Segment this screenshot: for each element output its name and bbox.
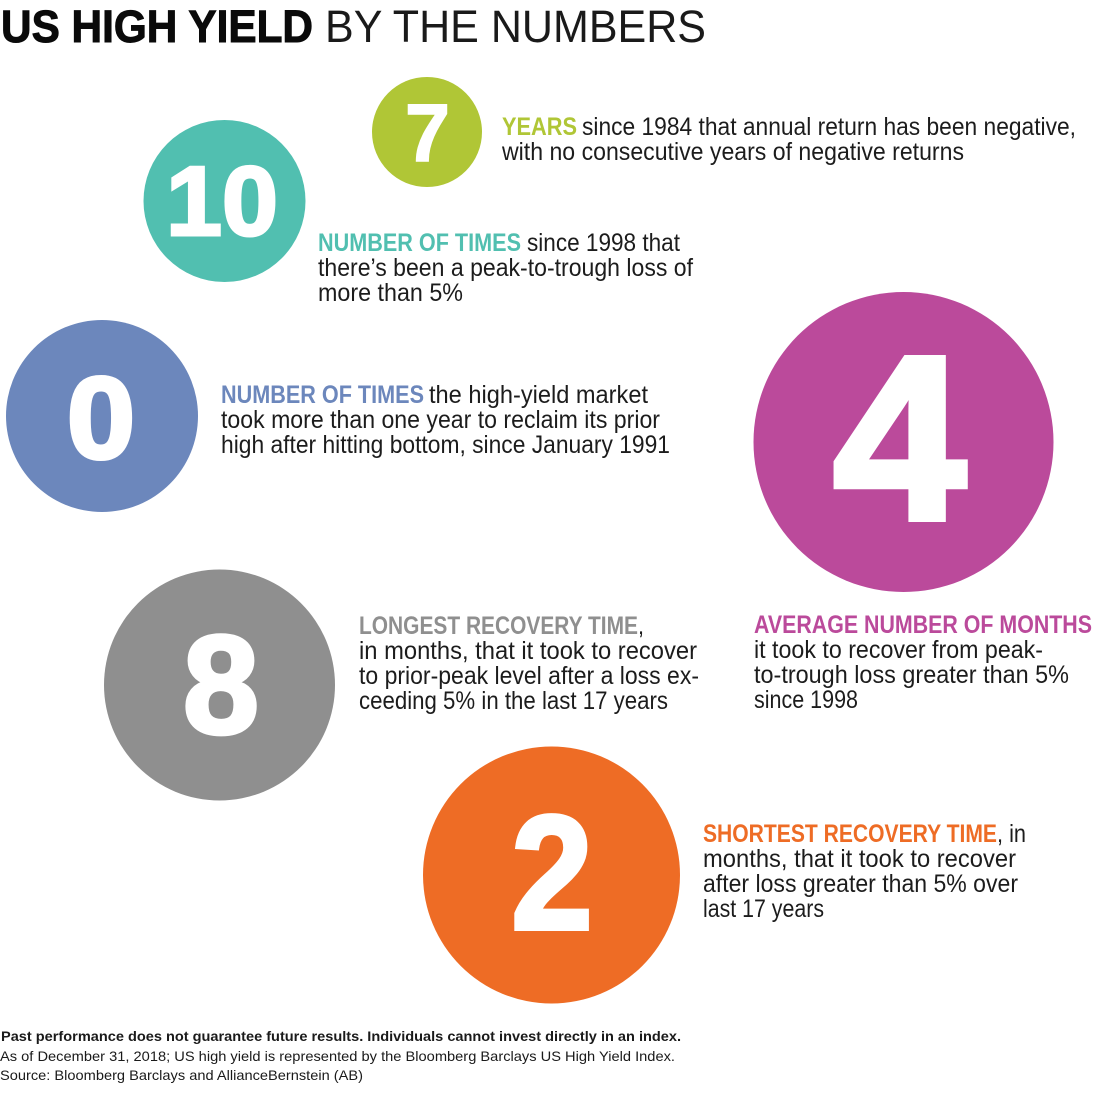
title: BY THE NUMBERS: [325, 1, 706, 52]
text: number of times peak-to-trough: NUMBER OF TIMES: [318, 229, 521, 257]
icon: orange circle 2: [423, 746, 680, 1004]
text: longest recovery: ,: [638, 612, 644, 640]
panel: 10 times: [144, 120, 693, 307]
icon: teal circle 10: [144, 120, 306, 282]
icon: teal circle 10: 10: [166, 146, 278, 256]
icon: gray circle 8: [104, 570, 335, 800]
text: average months: [754, 611, 1092, 714]
icon: gray circle 8: 8: [183, 606, 259, 763]
text: average months: to-trough loss greater than 5%: [754, 661, 1069, 689]
text: shortest recovery: months, that it took to recover: [703, 845, 1016, 873]
panel: 0 times: [6, 320, 670, 512]
icon: green circle 7: [372, 77, 482, 187]
panel: 2 shortest: [423, 746, 1026, 1004]
footnote: [0, 1028, 681, 1083]
panel: 4 months: [754, 292, 1092, 714]
text: longest recovery: [359, 612, 699, 715]
text: longest recovery: LONGEST RECOVERY TIME: [359, 612, 638, 640]
text: number of times peak-to-trough: [318, 229, 693, 307]
icon: blue circle 0: [6, 320, 198, 512]
text: shortest recovery: after loss greater than 5% over: [703, 870, 1018, 898]
text: longest recovery: to prior-peak level after a loss ex-: [359, 662, 699, 690]
text: longest recovery: in months, that it took to recover: [359, 637, 697, 665]
icon: orange circle 2: 2: [511, 781, 593, 964]
icon: green circle 7: 7: [405, 88, 450, 179]
text: shortest recovery: SHORTEST RECOVERY TIME: [703, 820, 997, 848]
text: number of times reclaim: NUMBER OF TIMES: [221, 381, 424, 409]
text: shortest recovery: [703, 820, 1026, 923]
footnote: Source: Bloomberg Barclays and AllianceBernstein (AB): [0, 1067, 363, 1083]
text: number of times peak-to-trough: more than 5%: [318, 279, 463, 307]
text: number of times reclaim: high after hitting bottom, since January 1991: [221, 431, 670, 459]
text: longest recovery: ceeding 5% in the last 17 years: [359, 687, 668, 715]
text: number of times peak-to-trough: there’s been a peak-to-trough loss of: [318, 254, 693, 282]
title: US HIGH YIELD: [1, 1, 313, 52]
text: years: [501, 113, 1076, 166]
text: number of times reclaim: [221, 381, 670, 459]
icon: magenta circle 4: [754, 292, 1054, 592]
icon: blue circle 0: 0: [67, 353, 135, 483]
text: average months: it took to recover from peak-: [754, 636, 1043, 664]
panel: 7 years: [372, 77, 1076, 187]
title: [1, 1, 706, 52]
footnote: As of December 31, 2018; US high yield is represented by the Bloomberg Barclays US High Yield Index.: [0, 1048, 675, 1064]
text: years: YEARS: [502, 113, 577, 141]
text: shortest recovery: last 17 years: [703, 895, 824, 923]
text: number of times reclaim: took more than one year to reclaim its prior: [221, 406, 660, 434]
footnote: Past performance does not guarantee future results. Individuals cannot invest directly in an index.: [1, 1028, 681, 1044]
text: shortest recovery: , in: [997, 820, 1026, 848]
text: average months: since 1998: [754, 686, 858, 714]
panel: 8 longest: [104, 570, 699, 800]
text: number of times reclaim: the high-yield market: [429, 381, 648, 409]
text: years: with no consecutive years of negative returns: [501, 138, 964, 166]
text: number of times peak-to-trough: since 1998 that: [527, 229, 680, 257]
icon: magenta circle 4: 4: [833, 307, 966, 569]
